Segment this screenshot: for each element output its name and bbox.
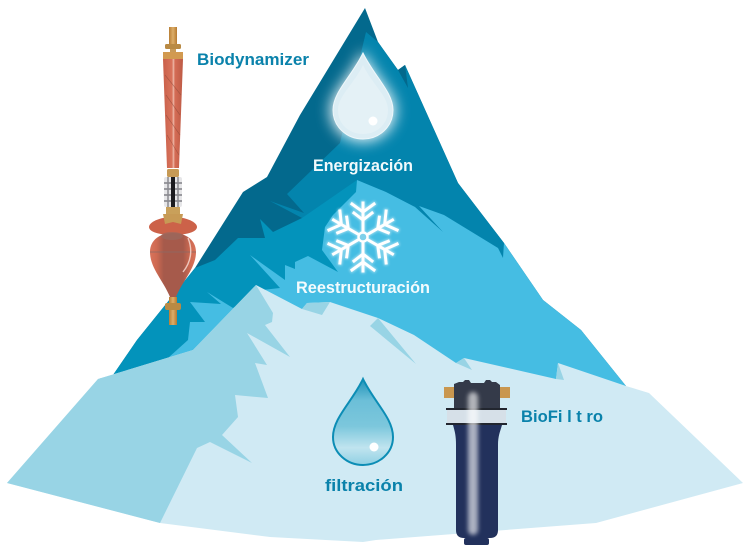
icon: snowflake [328,203,398,271]
mountain: lower snow layer [7,285,743,542]
label: filtración: filtración [325,477,403,495]
label: BioFiltro: BioFi l t ro [521,408,603,426]
label: Reestructuración: Reestructuración [296,279,430,297]
label: Energización: Energización [313,157,413,175]
mountain: middle layer [98,180,626,386]
device: Biodynamizer [149,27,197,325]
icon: filtration water drop [333,379,393,465]
icon: glowing water drop [330,50,396,142]
label: Biodynamizer: Biodynamizer [197,51,310,69]
device: BioFiltro water filter [444,380,510,545]
mountain: dark upper layer [113,8,626,386]
